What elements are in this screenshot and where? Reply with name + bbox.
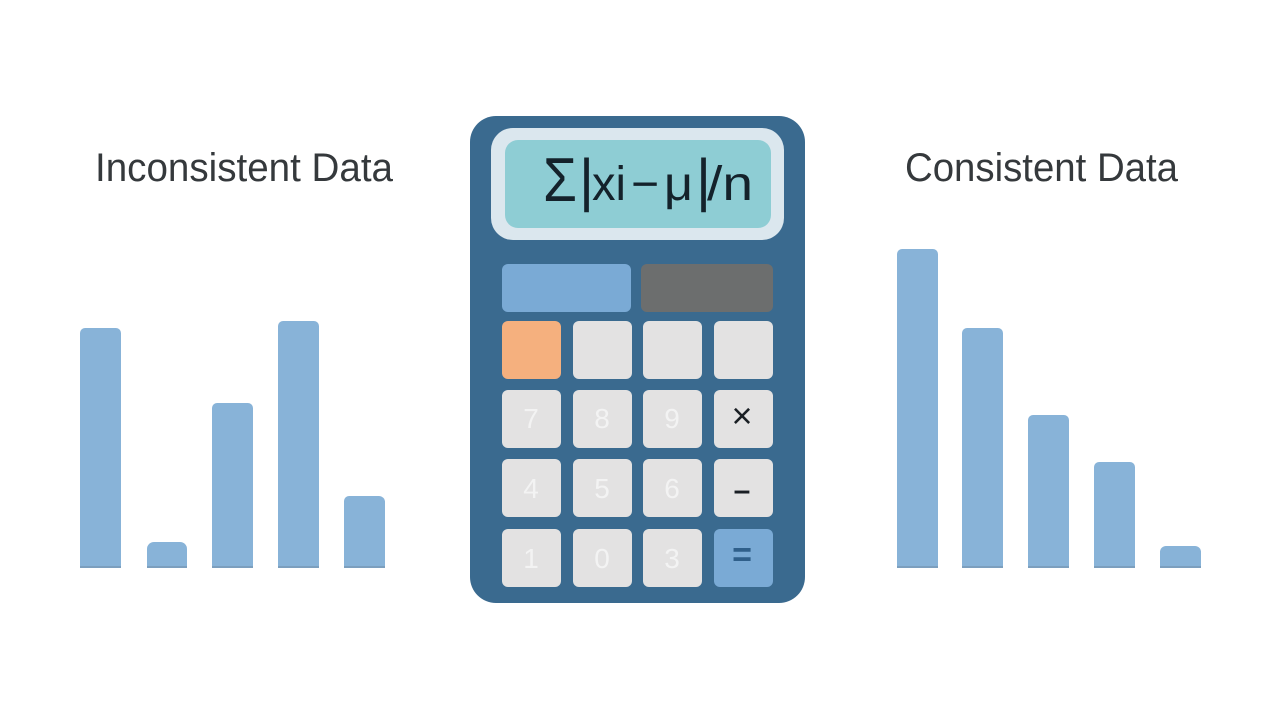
formula: | xyxy=(696,148,711,213)
wide key: grey xyxy=(641,264,773,312)
key: orange xyxy=(502,321,561,379)
keypad row: 4 5 6 −: 4 xyxy=(523,473,539,504)
keypad row: 1 0 3 =: = xyxy=(732,536,752,574)
keypad row: 7 8 9 ×: × xyxy=(731,395,753,436)
formula: − xyxy=(631,158,659,211)
keypad row: 4 5 6 −: 5 xyxy=(594,473,610,504)
calculator body xyxy=(470,116,805,603)
display screen xyxy=(491,128,784,240)
keypad row: 1 0 3 =: 0 xyxy=(594,543,610,574)
keypad row: 1 0 3 =: 1 xyxy=(523,543,539,574)
keypad row: 7 8 9 ×: 7 xyxy=(523,403,539,434)
formula xyxy=(543,146,753,215)
wide key: blue xyxy=(502,264,631,312)
keypad row: 4 5 6 − xyxy=(502,459,773,517)
keypad row: 4 5 6 −: 6 xyxy=(664,473,680,504)
bar chart: inconsistent data xyxy=(80,321,385,568)
formula: xi xyxy=(592,158,626,211)
blank keys xyxy=(573,321,773,379)
keypad row: 1 0 3 = xyxy=(502,529,773,587)
keypad row: 1 0 3 =: 3 xyxy=(664,543,680,574)
formula: /n xyxy=(707,158,753,211)
bar chart: consistent data xyxy=(897,249,1201,568)
heading: Consistent Data: Consistent Data xyxy=(905,146,1179,190)
formula: Σ xyxy=(543,146,577,215)
calculator xyxy=(470,116,805,603)
heading: Inconsistent Data: Inconsistent Data xyxy=(95,146,394,190)
formula: μ xyxy=(664,158,693,211)
keypad row: 4 5 6 −: – xyxy=(734,474,750,507)
keypad row: 7 8 9 × xyxy=(502,390,773,448)
formula: | xyxy=(579,148,594,213)
keypad row: 7 8 9 ×: 9 xyxy=(664,403,680,434)
keypad row: 7 8 9 ×: 8 xyxy=(594,403,610,434)
